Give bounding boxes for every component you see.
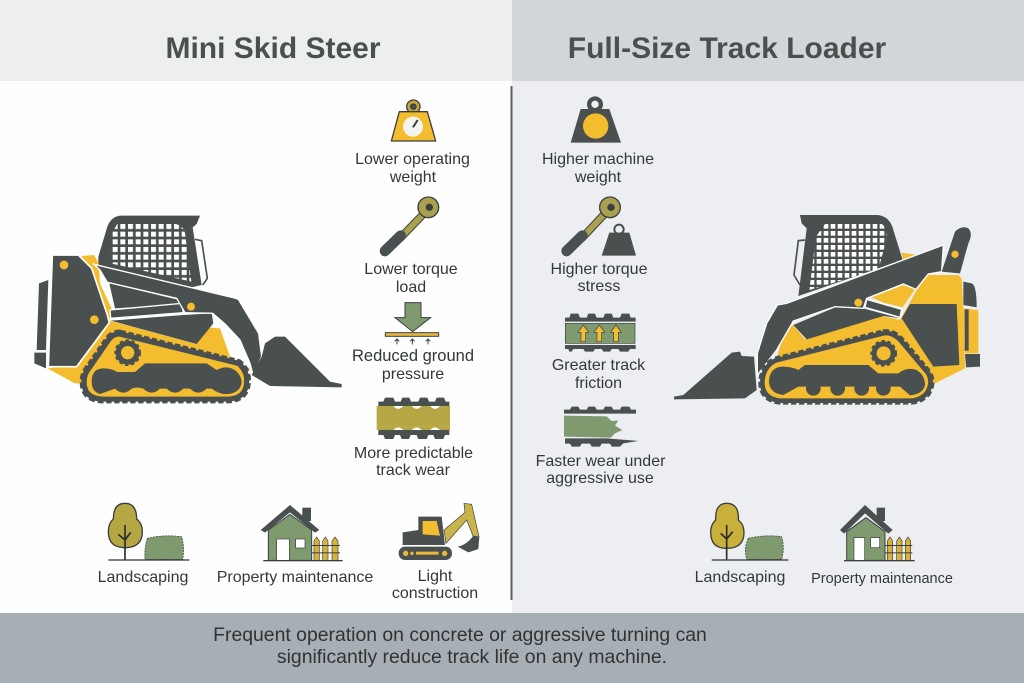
- item: more predictable track wear: track wear: [376, 462, 451, 479]
- application: light construction left: [392, 503, 479, 602]
- item: reduced ground pressure: pressure: [382, 366, 444, 383]
- illustration: full-size track loader: [674, 215, 980, 401]
- item: higher machine weight: [542, 96, 654, 186]
- item: greater track friction: Greater track: [552, 357, 646, 374]
- footer note: Frequent operation on concrete or aggressive turning can: [213, 624, 707, 646]
- application: property maintenance left: Property maintenance: [217, 569, 373, 586]
- item: higher machine weight: Higher machine: [542, 151, 654, 168]
- icon: ratchet wrench with weight: [567, 197, 636, 256]
- application: landscaping right: Landscaping: [695, 569, 785, 586]
- item: reduced ground pressure: Reduced ground: [352, 347, 474, 365]
- item: more predictable track wear: [354, 398, 473, 479]
- icon: damaged track: [564, 407, 638, 447]
- application: landscaping right: [695, 503, 788, 586]
- item: lower torque load: Lower torque: [364, 261, 458, 278]
- icon: pressure arrow on plate: [385, 303, 439, 344]
- item: lower operating weight: Lower operating: [355, 151, 470, 168]
- application: property maintenance left: [217, 505, 373, 586]
- item: lower torque load: [364, 197, 458, 296]
- header: left: Mini Skid Steer: [165, 32, 381, 65]
- application: light construction left: construction: [392, 585, 478, 602]
- icon: tree and hedge: [711, 503, 788, 561]
- icon: mini excavator: [399, 503, 479, 560]
- item: faster wear under aggressive use: Faster wear under: [536, 453, 666, 470]
- item: faster wear under aggressive use: [536, 407, 666, 487]
- icon: ratchet wrench: [385, 197, 439, 251]
- icon: even worn track: [377, 398, 450, 439]
- header: right: Full-Size Track Loader: [568, 32, 887, 65]
- application: light construction left: Light: [418, 568, 453, 585]
- icon: house and fence: [840, 505, 915, 561]
- item: faster wear under aggressive use: aggressive use: [546, 470, 654, 487]
- application: landscaping left: [98, 503, 189, 586]
- panel: right background: [512, 81, 1024, 613]
- footer note: significantly reduce track life on any machine.: [277, 646, 667, 668]
- item: greater track friction: [552, 314, 646, 392]
- header: right: [512, 0, 1024, 81]
- icon: tree and hedge: [108, 503, 189, 561]
- item: more predictable track wear: More predictable: [354, 445, 473, 462]
- panel: left background: [0, 81, 512, 613]
- item: higher torque stress: Higher torque: [551, 261, 648, 278]
- icon: yellow weight with gauge: [391, 100, 436, 141]
- illustration: mini skid steer: [34, 216, 342, 399]
- item: higher torque stress: stress: [578, 278, 620, 295]
- icon: house and fence: [261, 505, 343, 561]
- item: lower torque load: load: [396, 279, 426, 296]
- icon: track with friction arrows: [565, 314, 636, 352]
- item: higher torque stress: [551, 197, 648, 295]
- item: higher machine weight: weight: [574, 169, 622, 186]
- application: property maintenance right: [811, 505, 953, 587]
- application: landscaping left: Landscaping: [98, 569, 188, 586]
- item: greater track friction: friction: [575, 375, 622, 392]
- footer note: [0, 613, 1024, 683]
- item: lower operating weight: [355, 100, 470, 186]
- application: property maintenance right: Property maintenance: [811, 571, 953, 587]
- item: reduced ground pressure: [352, 303, 474, 383]
- icon: dark weight: [571, 96, 621, 143]
- item: lower operating weight: weight: [389, 169, 437, 186]
- header: left: [0, 0, 512, 81]
